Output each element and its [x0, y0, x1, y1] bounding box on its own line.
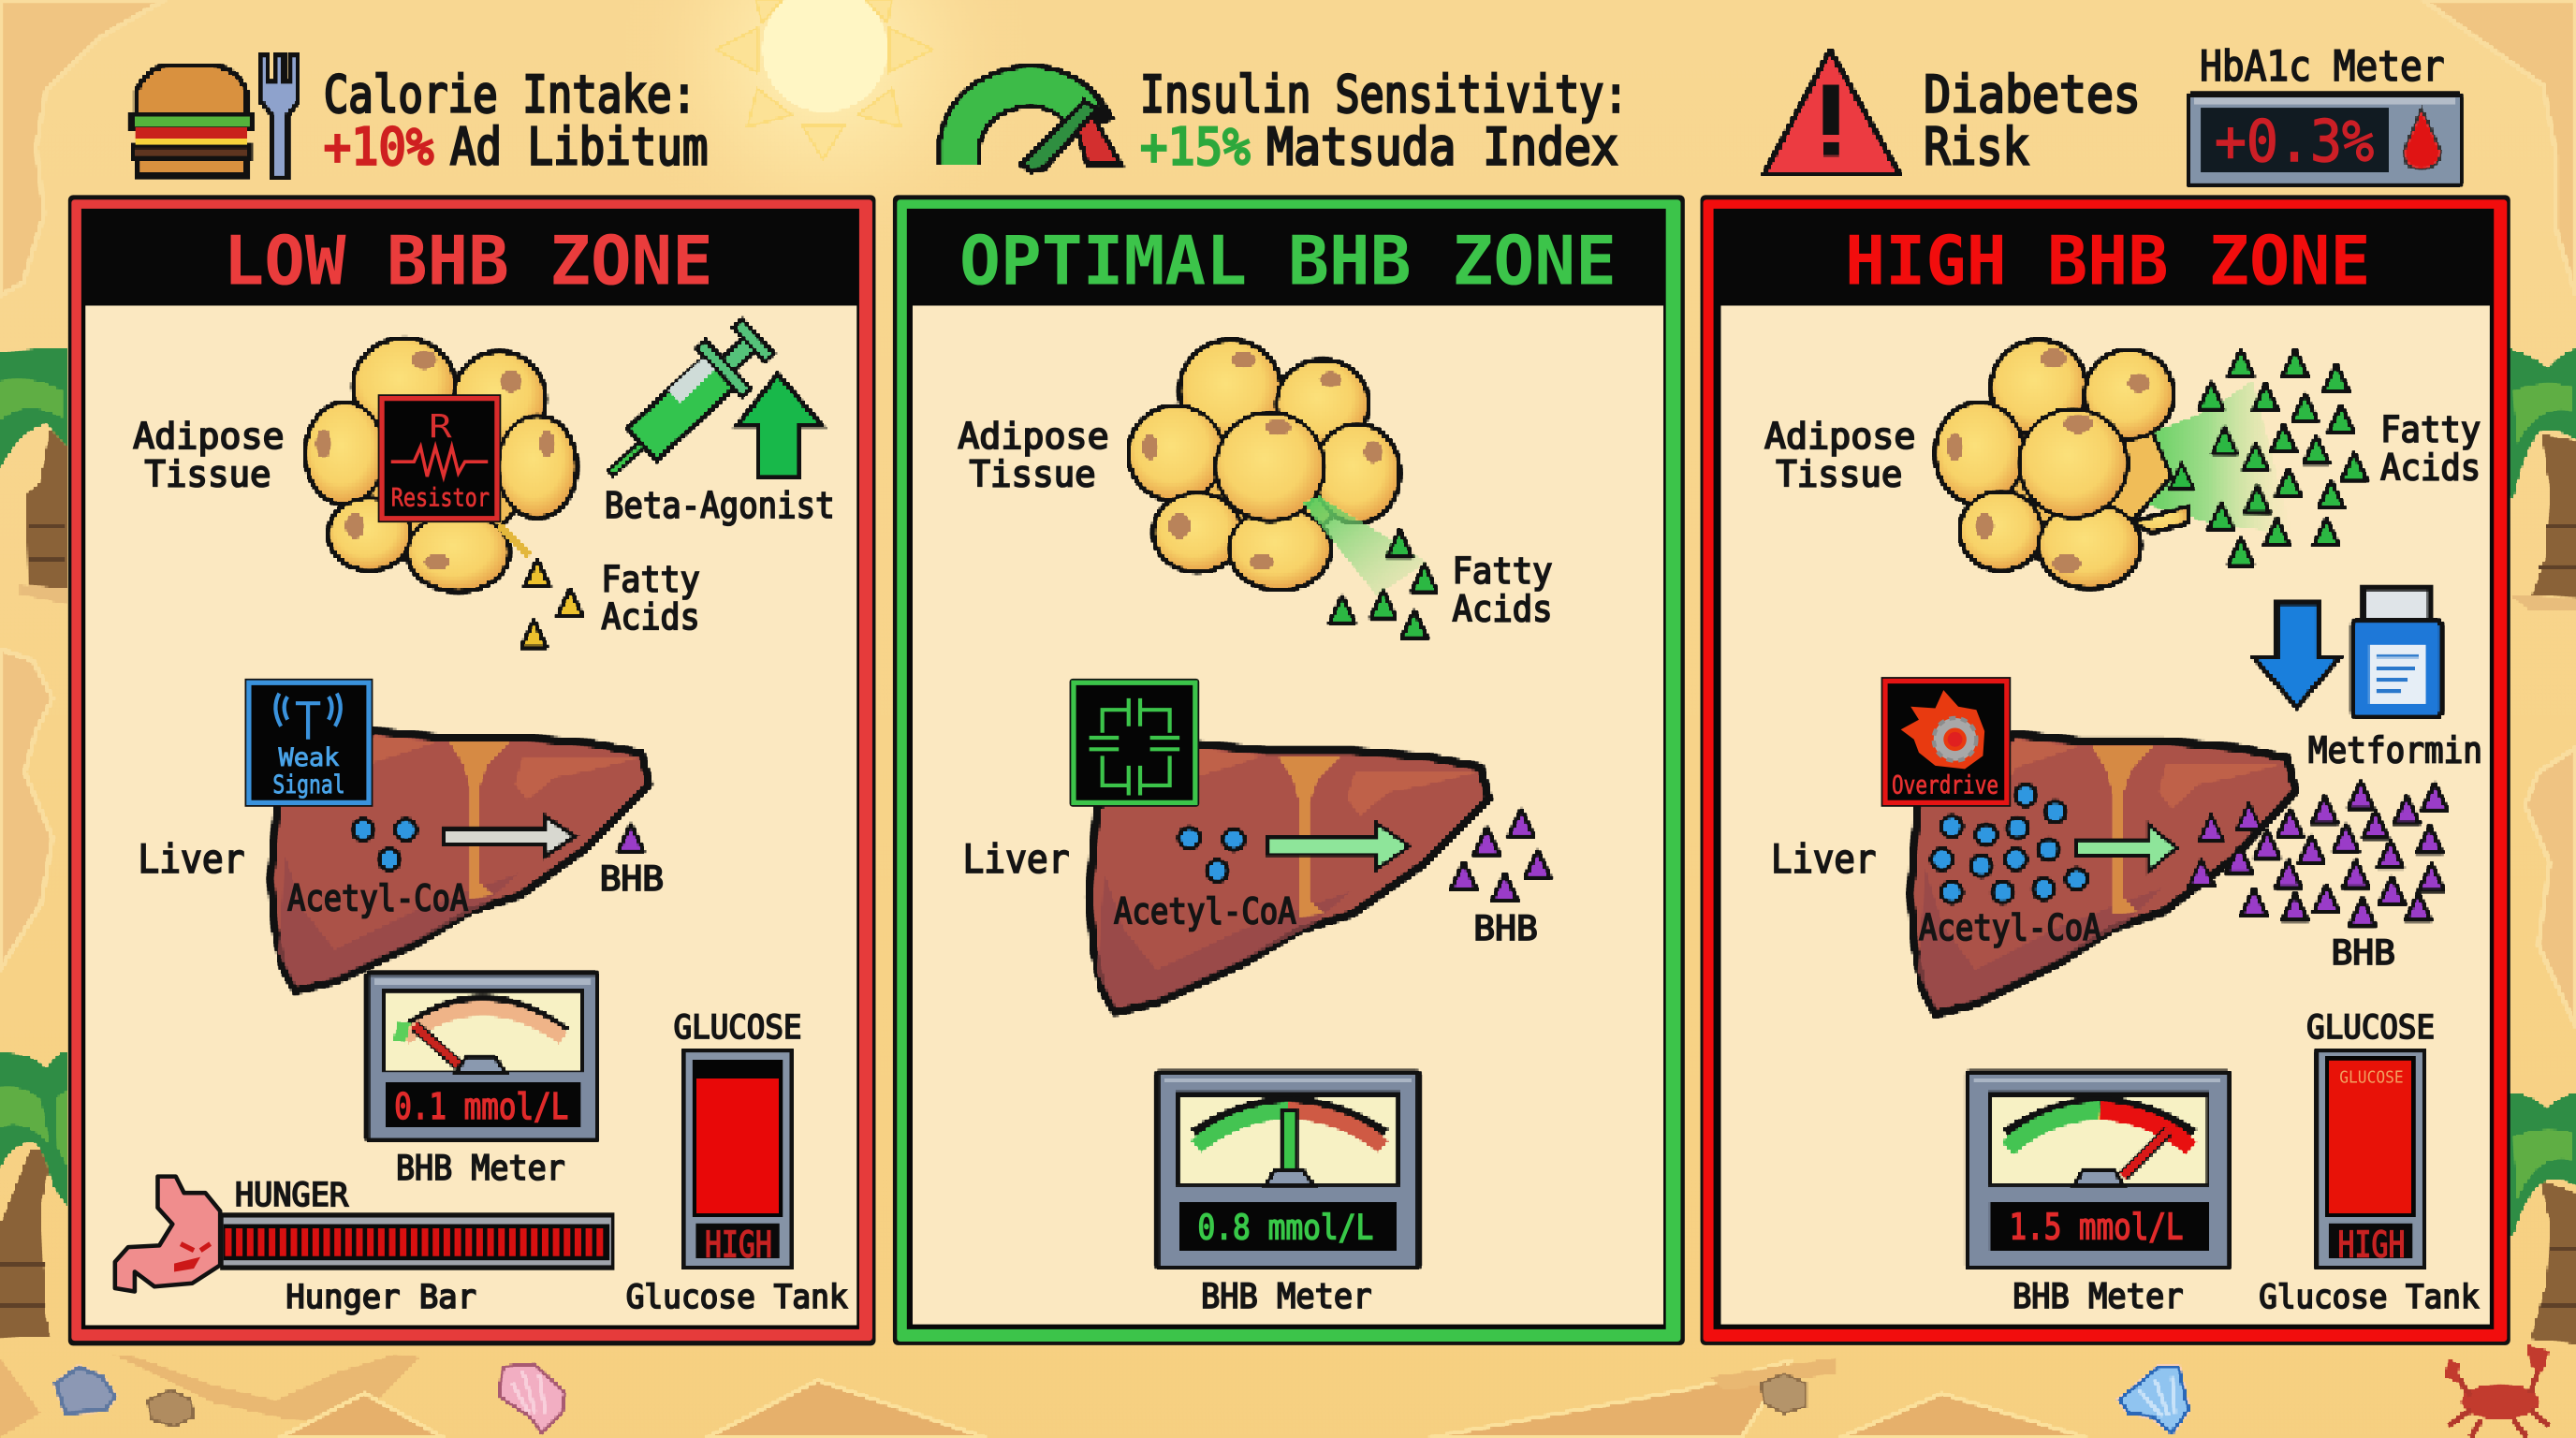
heading: calorie intake [324, 41, 2445, 177]
sun [716, 0, 933, 159]
acetyl-coa dots: low [353, 819, 417, 870]
acetyl-coa dots: optimal [1178, 828, 1244, 881]
readout: high: HIGH [2338, 1225, 2405, 1267]
sand patch: left middle [0, 649, 52, 970]
icon: weak signal [245, 679, 373, 807]
text: matsuda index: Matsuda Index [1266, 118, 1618, 177]
heading: hba1c meter: HbA1c Meter [2200, 41, 2445, 91]
fatty acids: yellow triangles [521, 560, 582, 648]
panel frame: high [1701, 195, 2510, 1345]
label: glucose: GLUCOSE [2306, 1008, 2435, 1047]
panel: high BHB zone [1701, 195, 2510, 1345]
arrow: down [2254, 603, 2339, 707]
label: hunger: HUNGER [235, 1176, 349, 1214]
panel frame: optimal [893, 195, 1685, 1345]
text: ad libitum: Ad Libitum [450, 118, 708, 177]
icon: fork [261, 56, 298, 178]
value: +10%: +10% [324, 118, 433, 177]
liver: high [1910, 734, 2295, 1014]
dunes [0, 1354, 2086, 1438]
adipose cluster: optimal [1129, 340, 1399, 590]
fatty acid spray: optimal [1303, 496, 1426, 594]
icon: stomach [115, 1177, 220, 1292]
adipose cluster: low [305, 339, 577, 592]
liver: optimal [1090, 744, 1488, 1012]
rock: brown small [148, 1390, 194, 1426]
label: overdrive: Overdrive [1892, 772, 1998, 800]
arrow: green [1268, 823, 1410, 869]
HbA1c meter device [2187, 92, 2463, 187]
heading: low bhb zone: LOW BHB ZONE [224, 222, 713, 301]
acetyl-coa dots: many [1931, 785, 2087, 902]
label: beta-agonist: Beta-Agonist [605, 485, 835, 527]
resistor icon [378, 394, 501, 522]
label: hunger bar: Hunger Bar [285, 1278, 476, 1316]
BHB meter: low [365, 971, 600, 1142]
icon: overdrive [1881, 677, 2011, 807]
metformin bottle [2352, 588, 2441, 716]
label: bhb: BHB [600, 858, 664, 899]
adipose cluster: high [1936, 340, 2188, 588]
label: fatty: Fatty [2380, 409, 2481, 451]
icon: warning triangle [1764, 51, 1899, 174]
glucose tank: high [2315, 1049, 2426, 1270]
label: fatty: Fatty [1453, 550, 1553, 593]
panel art: high [1910, 340, 2447, 1270]
label: R: R [429, 407, 453, 446]
label: liver: Liver [962, 836, 1070, 882]
sun glow [620, 0, 1030, 261]
label: tissue: Tissue [970, 454, 1096, 496]
label: bhb meter: BHB Meter [1201, 1276, 1372, 1316]
label: acetyl-coa: Acetyl-CoA [1919, 907, 2101, 949]
label: adipose: Adipose [133, 416, 285, 458]
panel: low BHB zone [68, 195, 875, 1345]
heading: diabetes: Diabetes [1924, 65, 2141, 124]
readout: 1.5 mmol/L: 1.5 mmol/L [2009, 1206, 2184, 1248]
text: low panel [133, 222, 848, 1316]
palm tree: top right [2509, 348, 2576, 611]
BHB triangles: optimal [1452, 810, 1550, 901]
label: acetyl-coa: Acetyl-CoA [1114, 890, 1296, 932]
glucose tank: low [681, 1049, 794, 1270]
readout: 0.1 mmol/L: 0.1 mmol/L [394, 1086, 568, 1128]
label: signal: Signal [272, 771, 345, 800]
icon: insulin gauge [959, 85, 1120, 171]
label: acids: Acids [601, 596, 700, 638]
readout: high: HIGH [705, 1225, 772, 1267]
BHB triangle: low [619, 825, 643, 851]
text: high panel [1764, 222, 2482, 1316]
label: fatty: Fatty [601, 559, 700, 601]
crab [2445, 1344, 2550, 1438]
label: liver: Liver [138, 836, 245, 882]
BHB meter: high [1965, 1070, 2231, 1270]
icon: balanced circuit [1070, 679, 1199, 807]
fatty acids: many green triangles [2170, 350, 2366, 565]
label: bhb: BHB [1473, 908, 1538, 948]
heading: high bhb zone: HIGH BHB ZONE [1845, 222, 2371, 301]
heading: optimal bhb zone: OPTIMAL BHB ZONE [959, 222, 1617, 301]
rock: blue grey [56, 1367, 115, 1413]
palm tree: top left [0, 348, 67, 605]
shell: pink [500, 1364, 565, 1432]
beta-agonist syringe [589, 313, 780, 497]
liver: low [271, 731, 649, 990]
label: tissue: Tissue [1776, 454, 1902, 496]
label: tissue: Tissue [144, 454, 271, 496]
crisp devices: optimal [1070, 679, 1199, 807]
label: acids: Acids [2380, 447, 2481, 489]
panel: optimal BHB zone [893, 195, 1685, 1345]
label: acids: Acids [1453, 588, 1553, 630]
crisp devices: low [115, 394, 614, 1292]
tank label: glucose: GLUCOSE [2339, 1069, 2404, 1088]
text: optimal panel [958, 222, 1617, 1316]
heading: risk: Risk [1924, 118, 2029, 177]
sand patch: top left [0, 0, 165, 296]
readout: 0.8 mmol/L: 0.8 mmol/L [1197, 1207, 1373, 1247]
hunger bar [220, 1212, 614, 1270]
label: metformin: Metformin [2308, 729, 2482, 771]
arrow: weak grey [444, 816, 575, 856]
label: glucose: GLUCOSE [674, 1008, 801, 1047]
BHB meter: optimal [1155, 1070, 1421, 1270]
panel art: optimal [1090, 340, 1550, 1270]
palm tree: bottom right [2509, 1093, 2576, 1344]
icon: burger [131, 66, 252, 176]
arrow: light green [2076, 825, 2177, 871]
label: bhb: BHB [2331, 932, 2395, 973]
rock: brown right [1761, 1373, 1806, 1413]
label: resistor: Resistor [391, 485, 490, 513]
crisp devices: high [1881, 677, 2011, 807]
sand patch: top right [2423, 0, 2576, 296]
panel frame: low [68, 195, 875, 1345]
label: weak: Weak [278, 744, 340, 772]
label: adipose: Adipose [958, 416, 1109, 458]
label: liver: Liver [1771, 836, 1876, 882]
heading: insulin sensitivity: Insulin Sensitivity: [1140, 65, 1628, 124]
shell: blue [2119, 1367, 2188, 1432]
value: +0.3%: +0.3% [2215, 109, 2374, 175]
value: +15%: +15% [1140, 118, 1251, 177]
fatty acids: green triangles [1330, 531, 1437, 638]
BHB triangles: many [2189, 782, 2447, 925]
label: glucose tank: Glucose Tank [2259, 1278, 2479, 1316]
label: acetyl-coa: Acetyl-CoA [287, 877, 468, 919]
fatty acid spray: high [2124, 381, 2291, 534]
label: bhb meter: BHB Meter [2012, 1276, 2184, 1316]
label: glucose tank: Glucose Tank [626, 1278, 848, 1316]
sand patch: right middle [2525, 748, 2576, 1027]
label: adipose: Adipose [1764, 416, 1915, 458]
panel art: low [271, 313, 822, 1270]
palm tree: bottom left [0, 1051, 67, 1339]
fatty acid leak sparkle [500, 526, 529, 555]
heading: calorie intake: Calorie Intake: [324, 65, 696, 124]
arrow: up [738, 374, 822, 477]
label: bhb meter: BHB Meter [396, 1148, 565, 1188]
header stat bar art [131, 51, 2463, 187]
